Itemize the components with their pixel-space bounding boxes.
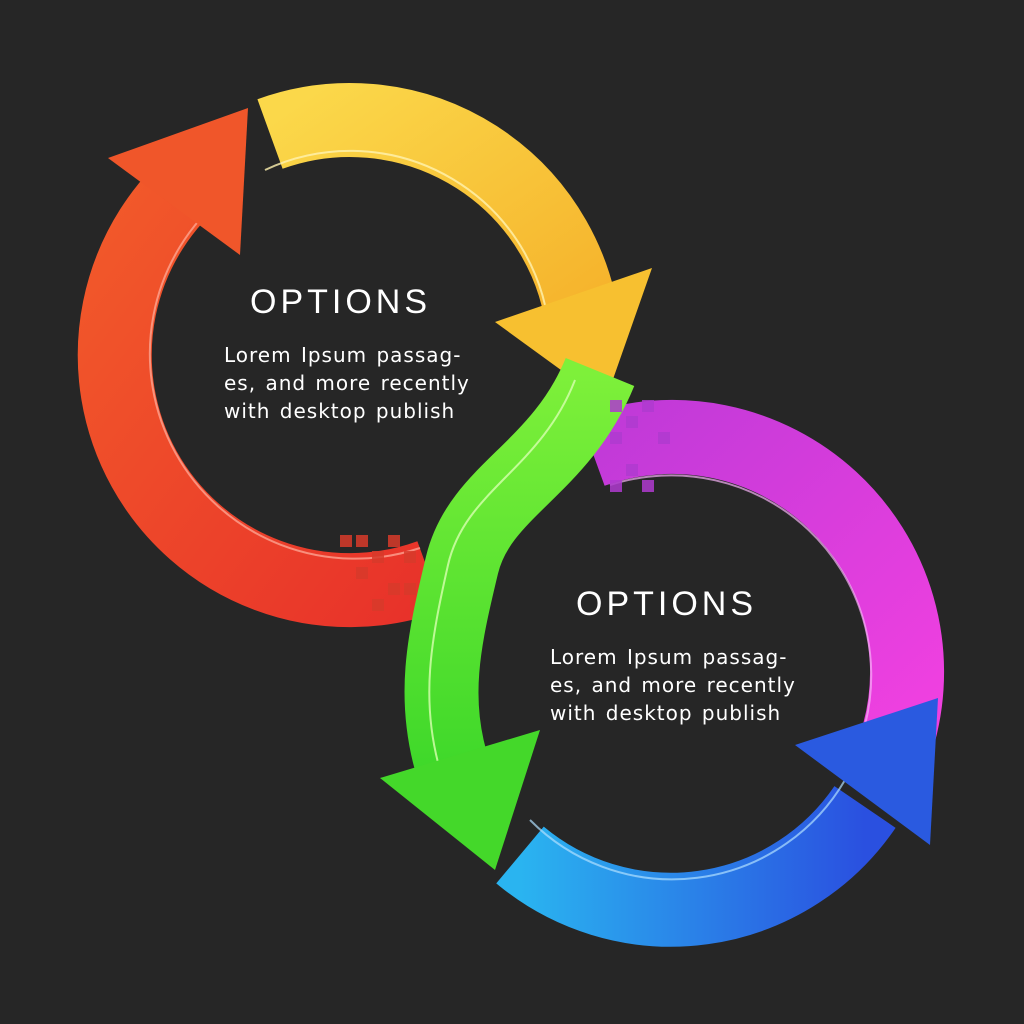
pixel squares: red [340,535,416,611]
text block: bottom: es, and more recently [550,673,796,697]
heading: options top: OPTIONS [250,283,431,321]
text block: bottom: Lorem Ipsum passag- [550,645,787,669]
heading: options bottom: OPTIONS [576,585,757,623]
text block: bottom: with desktop publish [550,701,781,725]
text block: top [224,343,470,423]
text block: top: with desktop publish [224,399,455,423]
arrow: blue [520,698,938,910]
text block: top: Lorem Ipsum passag- [224,343,461,367]
arrow: green [380,372,600,870]
text block: bottom [550,645,796,725]
arrow: yellow [265,120,652,402]
pixel squares: magenta [610,400,670,492]
text block: top: es, and more recently [224,371,470,395]
arrow: red [108,108,430,590]
arrow: magenta [592,437,907,733]
